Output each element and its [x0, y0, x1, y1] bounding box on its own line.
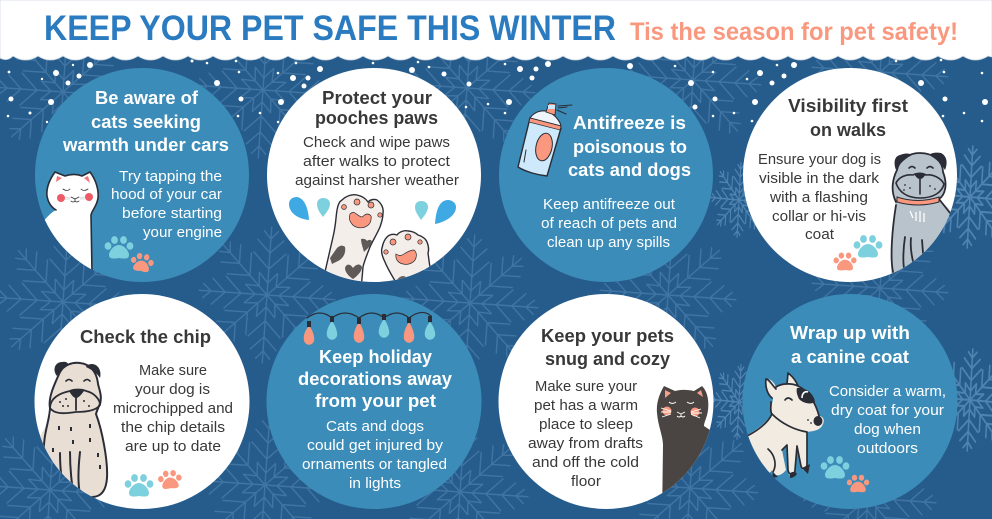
panel: cats under cars	[20, 68, 249, 282]
body text: antifreeze: of reach of pets and	[541, 215, 677, 232]
body text: holiday decorations: could get injured by	[307, 437, 444, 454]
body text: canine coat: dry coat for your	[831, 402, 944, 419]
body text: holiday decorations	[302, 418, 447, 492]
body text: holiday decorations: in lights	[349, 475, 401, 492]
heading: snug and cozy: Keep your pets	[541, 325, 674, 346]
illustration: two paws	[324, 194, 430, 282]
body text: snug and cozy: floor	[571, 473, 601, 490]
body text: visibility: Ensure your dog is	[758, 151, 881, 168]
heading: antifreeze: cats and dogs	[568, 159, 691, 180]
illustration: grey dog	[890, 152, 950, 274]
illustration: white bull terrier	[748, 372, 824, 478]
body text: cats under cars: before starting	[122, 205, 222, 222]
heading: pooches paws	[315, 87, 438, 128]
body text: pooches paws: after walks to protect	[303, 153, 451, 170]
illustration: beige dog	[40, 362, 108, 498]
title: KEEP YOUR PET SAFE THIS WINTER	[44, 9, 616, 48]
body text: visibility: collar or hi-vis	[772, 208, 866, 225]
panel: snug and cozy	[498, 294, 725, 519]
body text: canine coat: Consider a warm,	[829, 383, 946, 400]
heading: holiday decorations: from your pet	[315, 390, 436, 411]
heading: cats under cars: cats seeking	[91, 111, 201, 132]
body text: canine coat: dog when	[854, 421, 921, 438]
body text: snug and cozy: pet has a warm	[534, 397, 638, 414]
body text: antifreeze: Keep antifreeze out	[543, 196, 676, 213]
heading: cats under cars: Be aware of	[95, 87, 199, 108]
body text: snug and cozy: and off the cold	[532, 454, 639, 471]
subtitle: Tis the season for pet safety!	[630, 18, 958, 46]
body text: snug and cozy: Make sure your	[535, 378, 637, 395]
panel: antifreeze	[499, 68, 713, 282]
body text: canine coat	[829, 383, 946, 457]
heading: pooches paws: pooches paws	[315, 107, 438, 128]
body text: pooches paws	[295, 134, 459, 189]
paw prints	[125, 469, 183, 497]
body text: check the chip	[113, 362, 233, 455]
body text: snug and cozy	[528, 378, 643, 490]
body text: pooches paws: Check and wipe paws	[303, 134, 450, 151]
falling snow dots	[7, 59, 988, 123]
body text: visibility: with a flashing	[769, 189, 868, 206]
body text: cats under cars: hood of your car	[111, 186, 222, 203]
header band with scalloped edge	[0, 0, 992, 60]
panel: holiday decorations	[266, 294, 482, 509]
body text: snug and cozy: place to sleep	[539, 416, 633, 433]
heading: cats under cars: warmth under cars	[62, 134, 229, 155]
body text: check the chip: are up to date	[125, 438, 221, 455]
heading: pooches paws: Protect your	[322, 87, 432, 108]
heading: snug and cozy	[541, 325, 674, 369]
icon: string of lights	[304, 312, 435, 345]
body text: visibility: visible in the dark	[759, 170, 880, 187]
paw prints	[821, 456, 869, 492]
illustration: black cat	[656, 386, 710, 493]
body text: visibility: coat	[805, 226, 835, 243]
illustration: white cat	[44, 171, 99, 270]
body text: holiday decorations: ornaments or tangled	[302, 456, 447, 473]
body text: canine coat: outdoors	[857, 440, 918, 457]
heading: canine coat: a canine coat	[791, 346, 909, 367]
heading: visibility: Visibility first	[788, 95, 908, 116]
body text: check the chip: your dog is	[135, 381, 210, 398]
body text: snug and cozy: away from drafts	[528, 435, 643, 452]
heading: check the chip: Check the chip	[80, 326, 211, 347]
body text: pooches paws: against harsher weather	[295, 172, 459, 189]
body text: antifreeze: clean up any spills	[547, 234, 670, 251]
heading: visibility: on walks	[810, 119, 886, 140]
heading: canine coat: Wrap up with	[790, 322, 910, 343]
body text: antifreeze	[541, 196, 677, 251]
panel: canine coat	[735, 294, 958, 509]
body text: cats under cars	[111, 168, 222, 241]
heading: antifreeze: Antifreeze is	[573, 112, 686, 133]
panel: check the chip	[30, 294, 250, 509]
body text: visibility	[758, 151, 881, 243]
heading: antifreeze: poisonous to	[573, 136, 687, 157]
heading: cats under cars	[62, 87, 229, 155]
heading: holiday decorations: decorations away	[298, 368, 453, 389]
body text: check the chip: Make sure	[139, 362, 207, 379]
icon: spray can	[518, 103, 572, 176]
heading: antifreeze	[568, 112, 691, 180]
body text: check the chip: microchipped and	[113, 400, 233, 417]
icon: water drops	[289, 197, 456, 224]
body text: holiday decorations: Cats and dogs	[326, 418, 424, 435]
body text: cats under cars: Try tapping the	[119, 168, 222, 185]
heading: holiday decorations: Keep holiday	[319, 346, 433, 367]
body text: cats under cars: your engine	[143, 224, 222, 241]
body text: check the chip: the chip details	[121, 419, 225, 436]
heading: holiday decorations	[298, 346, 453, 411]
heading: snug and cozy: snug and cozy	[545, 348, 671, 369]
paw prints	[105, 236, 155, 273]
paw prints	[833, 235, 882, 270]
panel: visibility	[743, 68, 960, 285]
panel: pooches paws	[267, 68, 481, 290]
heading: visibility	[788, 95, 908, 140]
heading: canine coat	[790, 322, 910, 367]
